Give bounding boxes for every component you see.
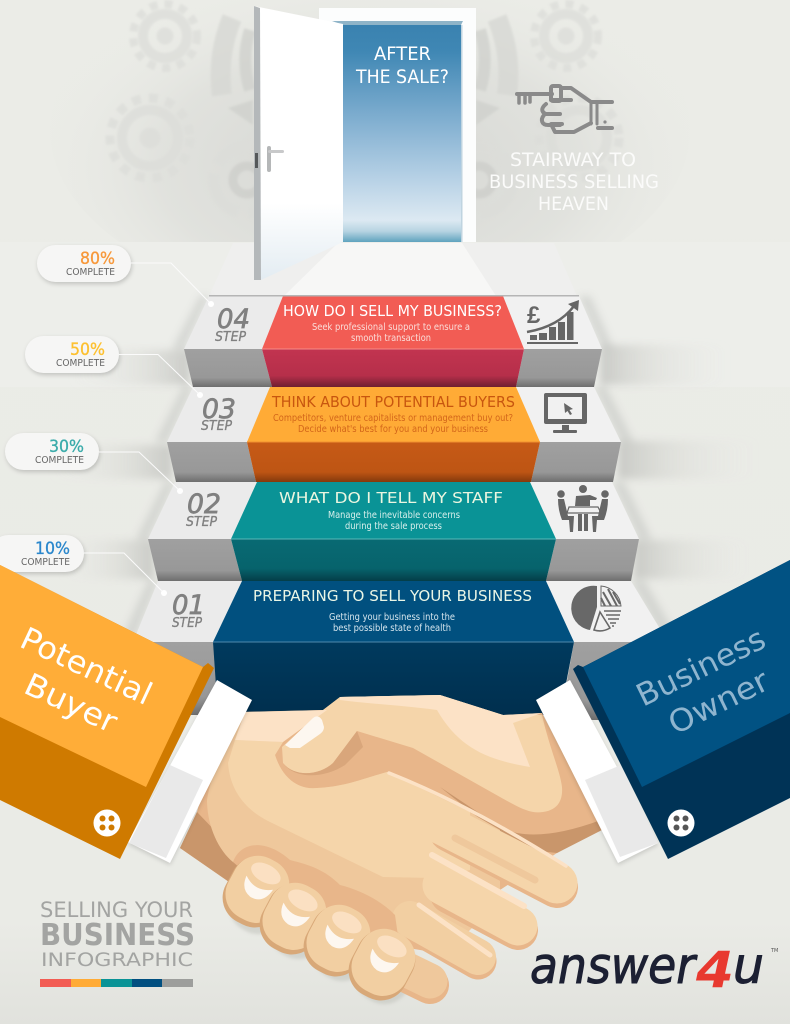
- step 2 description: during the sale process: [345, 521, 442, 532]
- step 3 heading: THINK ABOUT POTENTIAL BUYERS: [271, 393, 515, 411]
- step 4 block: [184, 295, 602, 387]
- callout: 10%: COMPLETE: [21, 557, 70, 568]
- step 3 description: Decide what's best for you and your business: [298, 424, 488, 435]
- owner hand upper: [282, 695, 562, 812]
- sleeve: potential buyer: Buyer: [19, 667, 123, 741]
- icon: pound growth chart: £: [527, 302, 541, 329]
- hand silhouette base: [180, 695, 602, 955]
- step 2 heading: WHAT DO I TELL MY STAFF: [279, 489, 503, 507]
- door: [254, 6, 476, 280]
- logo: answer4u: [530, 937, 778, 999]
- callout: 50%: 50%: [70, 340, 105, 359]
- step 4 number: 04: [217, 304, 250, 335]
- floor band: [0, 242, 790, 387]
- landing floor: [209, 243, 577, 296]
- callout: 50%: COMPLETE: [56, 358, 105, 369]
- sleeve: business owner: [573, 560, 790, 859]
- callout: 80%: COMPLETE: [66, 267, 115, 278]
- cuff: owner: [536, 680, 658, 863]
- finger 3: [294, 895, 380, 986]
- finger 2: [250, 873, 336, 964]
- step 3 number: STEP: [201, 419, 232, 434]
- sleeve front panel: [0, 565, 203, 787]
- thumb nail: [285, 716, 324, 748]
- handshake: [180, 695, 602, 1013]
- icon: monitor: [544, 393, 587, 433]
- step 1 number: STEP: [172, 616, 202, 631]
- step 4 number: [215, 304, 250, 345]
- lower fingers: [213, 845, 430, 1010]
- sleeve: potential buyer: [0, 565, 214, 859]
- infographic title: BUSINESS: [40, 918, 195, 953]
- step 1 heading: PREPARING TO SELL YOUR BUSINESS: [253, 587, 532, 605]
- heading: stairway to business selling heaven: [489, 150, 659, 215]
- icon: hand holding key: [517, 86, 612, 132]
- callout: 50%: [25, 336, 119, 373]
- step 3 block: [167, 387, 621, 482]
- door frame: [319, 8, 476, 242]
- sleeve label: Potential: [15, 621, 158, 713]
- step 1 description: [329, 612, 455, 634]
- logo: answer4u: 4: [695, 941, 734, 999]
- finger 4: [339, 919, 425, 1010]
- step 1 description: best possible state of health: [333, 623, 451, 634]
- stair shadows: [50, 296, 758, 642]
- step 4 description: Seek professional support to ensure a: [312, 322, 470, 333]
- step 4 number: STEP: [215, 330, 246, 345]
- callout: 30%: COMPLETE: [35, 455, 84, 466]
- callout: 10%: [0, 535, 84, 572]
- dark wrist wedge: [180, 812, 245, 884]
- owner hand highlight: [340, 695, 542, 767]
- step 2 description: Manage the inevitable concerns: [328, 510, 460, 521]
- leader lines: [84, 263, 214, 596]
- step 3 description: Competitors, venture capitalists or management buy out?: [273, 413, 513, 424]
- finger 1: [213, 846, 299, 937]
- callout: 30%: [5, 433, 99, 470]
- text: after the sale: AFTER: [374, 43, 431, 65]
- thumb line: [283, 731, 363, 775]
- callout: 80%: 80%: [80, 249, 115, 268]
- door: THE SALE?: [355, 66, 449, 88]
- step 2 number: STEP: [186, 515, 217, 530]
- callout: 10%: 10%: [35, 539, 70, 558]
- heading: stairway to business selling heaven: BUSINESS SELLING: [489, 172, 659, 193]
- callout: 80%: [37, 245, 131, 282]
- button icon: [668, 810, 694, 836]
- finger b: [426, 855, 528, 945]
- sleeve front panel: [583, 560, 790, 787]
- sky opening: [343, 25, 461, 242]
- logo: answer4u: u: [733, 937, 764, 995]
- button icon: [94, 810, 120, 836]
- infographic title: SELLING YOUR: [40, 898, 193, 922]
- colour key bar: [40, 979, 193, 987]
- infographic title: INFOGRAPHIC: [41, 949, 193, 971]
- buyer palm main: [228, 740, 470, 878]
- step 3 number: 03: [202, 394, 236, 425]
- door handle: [255, 146, 284, 172]
- heading: stairway to business selling heaven: HEAVEN: [538, 194, 609, 215]
- sleeve: business owner: Owner: [663, 663, 775, 742]
- logo: answer4u: answer: [530, 937, 698, 995]
- buyer palm outer: [207, 712, 500, 950]
- step 2 number: 02: [187, 489, 221, 520]
- logo: answer4u: TM: [770, 948, 778, 954]
- shadow under fingers: [220, 859, 426, 1013]
- owner hand dark underside: [440, 787, 602, 853]
- finger c: [410, 905, 490, 961]
- callout: 30%: 30%: [49, 437, 84, 456]
- door leaf: [254, 6, 343, 280]
- icon: meeting: [557, 485, 609, 532]
- step 1 block: [133, 581, 668, 720]
- cuff: buyer: [128, 680, 252, 863]
- icon: pound growth chart: [527, 300, 579, 344]
- step 1 description: Getting your business into the: [329, 612, 455, 623]
- sleeve label: Business: [631, 621, 771, 714]
- step 4 heading: HOW DO I SELL MY BUSINESS?: [283, 302, 502, 320]
- step 4 description: [312, 322, 470, 344]
- icon: pie chart: [571, 586, 621, 631]
- step 4 description: smooth transaction: [351, 333, 431, 344]
- step 1 number: 01: [172, 590, 205, 621]
- finger a: [389, 773, 578, 904]
- buyer top highlight: [235, 710, 327, 742]
- step 2 description: [328, 510, 460, 532]
- infographic title: [40, 898, 195, 971]
- step 2 block: [148, 482, 639, 581]
- step 3 description: [273, 413, 513, 435]
- wall glow and gears: [50, 0, 690, 310]
- heading: stairway to business selling heaven: STAIRWAY TO: [510, 150, 636, 171]
